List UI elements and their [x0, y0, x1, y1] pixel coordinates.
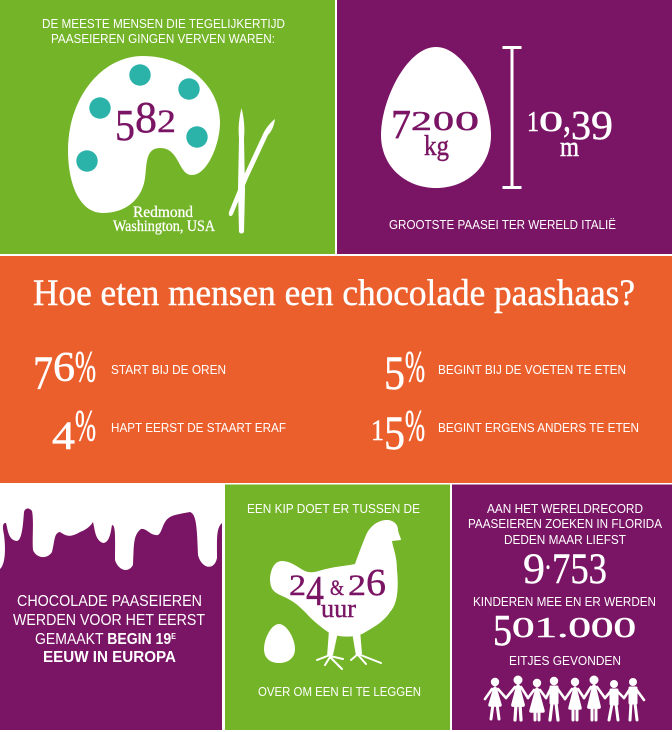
stat: 5%: %	[405, 342, 425, 391]
number: 7200 kg: kg	[424, 130, 449, 162]
icon: paint palette	[68, 56, 220, 213]
number: 7200 kg: 7	[391, 101, 411, 147]
stat: 15%: 1	[371, 414, 384, 447]
title: Hoe eten mensen een chocolade paashaas?	[33, 273, 635, 314]
number: 9.753: 753	[552, 546, 607, 593]
number: 24 & 26 uur: 2	[289, 569, 306, 602]
panel: egg hunt world record	[452, 484, 672, 730]
number: 24 & 26 uur: uur	[321, 594, 356, 623]
number: 501.000: 5	[493, 606, 512, 655]
text: chocolate history: CHOCOLADE PAASEIEREN	[17, 593, 202, 610]
stat: 76%: START BIJ DE OREN	[111, 363, 226, 377]
icon: small egg	[264, 624, 295, 663]
stat: 4%	[52, 401, 286, 458]
panel: chicken egg laying	[225, 484, 450, 730]
number: 24 & 26 uur: 6	[366, 562, 386, 604]
height marker	[502, 46, 522, 189]
number: 24 & 26 uur	[289, 562, 386, 623]
number: 10,39 m: 9	[591, 102, 613, 148]
location label: Washington, USA	[113, 218, 215, 235]
number: 10,39 m: m	[560, 131, 579, 163]
icon: paint brushes	[229, 108, 275, 234]
text: record intro: PAASEIEREN ZOEKEN IN FLORIDA	[468, 517, 663, 531]
stat: 15%: 5	[384, 407, 405, 460]
text: chocolate history: WERDEN VOOR HET EERST	[13, 612, 205, 629]
caption: biggest egg: GROOTSTE PAASEI TER WERELD ITALIË	[389, 218, 616, 232]
text: chocolate history: GEMAAKT BEGIN 19	[35, 631, 178, 648]
heading: palette panel: DE MEESTE MENSEN DIE TEGELIJKERTIJD	[42, 17, 285, 31]
panel: palette record	[0, 0, 335, 254]
stat: 76%: %	[75, 342, 96, 391]
text: eggs found: EITJES GEVONDEN	[509, 654, 621, 668]
text: chicken top: EEN KIP DOET ER TUSSEN DE	[247, 502, 420, 516]
number: 24 & 26 uur: 4	[306, 569, 324, 615]
location label	[113, 204, 215, 235]
text: chicken bottom: OVER OM EEN EI TE LEGGEN	[258, 685, 421, 699]
number: 582: 8	[135, 93, 157, 142]
icon: egg	[381, 47, 491, 188]
number: 7200 kg: 0	[433, 106, 454, 136]
number: 10,39 m: 1	[527, 107, 539, 138]
heading: palette panel	[42, 17, 285, 46]
text: record intro: AAN HET WERELDRECORD	[487, 502, 643, 516]
text: chocolate history	[13, 593, 205, 666]
number: 9.753: ·	[544, 551, 552, 584]
text: chocolate history: EEUW IN EUROPA	[43, 649, 176, 666]
number: 10,39 m	[527, 95, 613, 163]
number: 501.000: 01.000	[512, 612, 636, 644]
stat: 15%: %	[405, 401, 425, 450]
number: 7200 kg: 0	[455, 106, 479, 136]
text: chocolate history: E	[171, 632, 177, 641]
stat: 5%	[384, 342, 626, 400]
stat: 15%	[371, 401, 639, 460]
stat: 15%: BEGINT ERGENS ANDERS TE ETEN	[438, 421, 639, 435]
number: 582	[115, 93, 176, 150]
icon: chicken	[270, 520, 401, 669]
number: 9.753: 9	[523, 546, 545, 593]
number: 501.000	[493, 606, 636, 655]
chocolate drip shape	[0, 508, 222, 730]
number: 582: 5	[115, 101, 135, 150]
panel: chocolate bunny survey	[0, 256, 672, 483]
stat: 5%: BEGINT BIJ DE VOETEN TE ETEN	[438, 363, 626, 377]
number: 24 & 26 uur: 2	[348, 569, 366, 602]
text: record intro	[468, 502, 663, 547]
number: 9.753	[523, 546, 607, 593]
text: children: KINDEREN MEE EN ER WERDEN	[473, 595, 656, 609]
location label: Redmond	[133, 204, 193, 221]
icon: row of children	[485, 676, 644, 720]
stat: 4%: 4	[52, 413, 75, 458]
stat: 5%: 5	[384, 347, 405, 400]
number: 24 & 26 uur: &	[330, 575, 344, 600]
stat: 4%: HAPT EERST DE STAART ERAF	[111, 421, 286, 435]
stat: 76%: 7	[33, 347, 53, 400]
stat: 4%: %	[75, 401, 96, 450]
number: 10,39 m: ,	[563, 95, 571, 140]
panel: chocolate history	[0, 508, 222, 730]
panel: biggest easter egg	[337, 0, 672, 254]
stat: 76%	[33, 342, 226, 400]
heading: palette panel: PAASEIEREN GINGEN VERVEN WAREN:	[51, 32, 275, 46]
number: 10,39 m: 3	[571, 102, 591, 148]
number: 10,39 m: 0	[539, 107, 563, 138]
text: record intro: DEDEN MAAR LIEFST	[504, 533, 626, 547]
number: 582: 2	[157, 104, 176, 140]
stat: 76%: 6	[53, 345, 75, 391]
number: 7200 kg	[391, 101, 479, 162]
number: 7200 kg: 2	[411, 106, 432, 136]
